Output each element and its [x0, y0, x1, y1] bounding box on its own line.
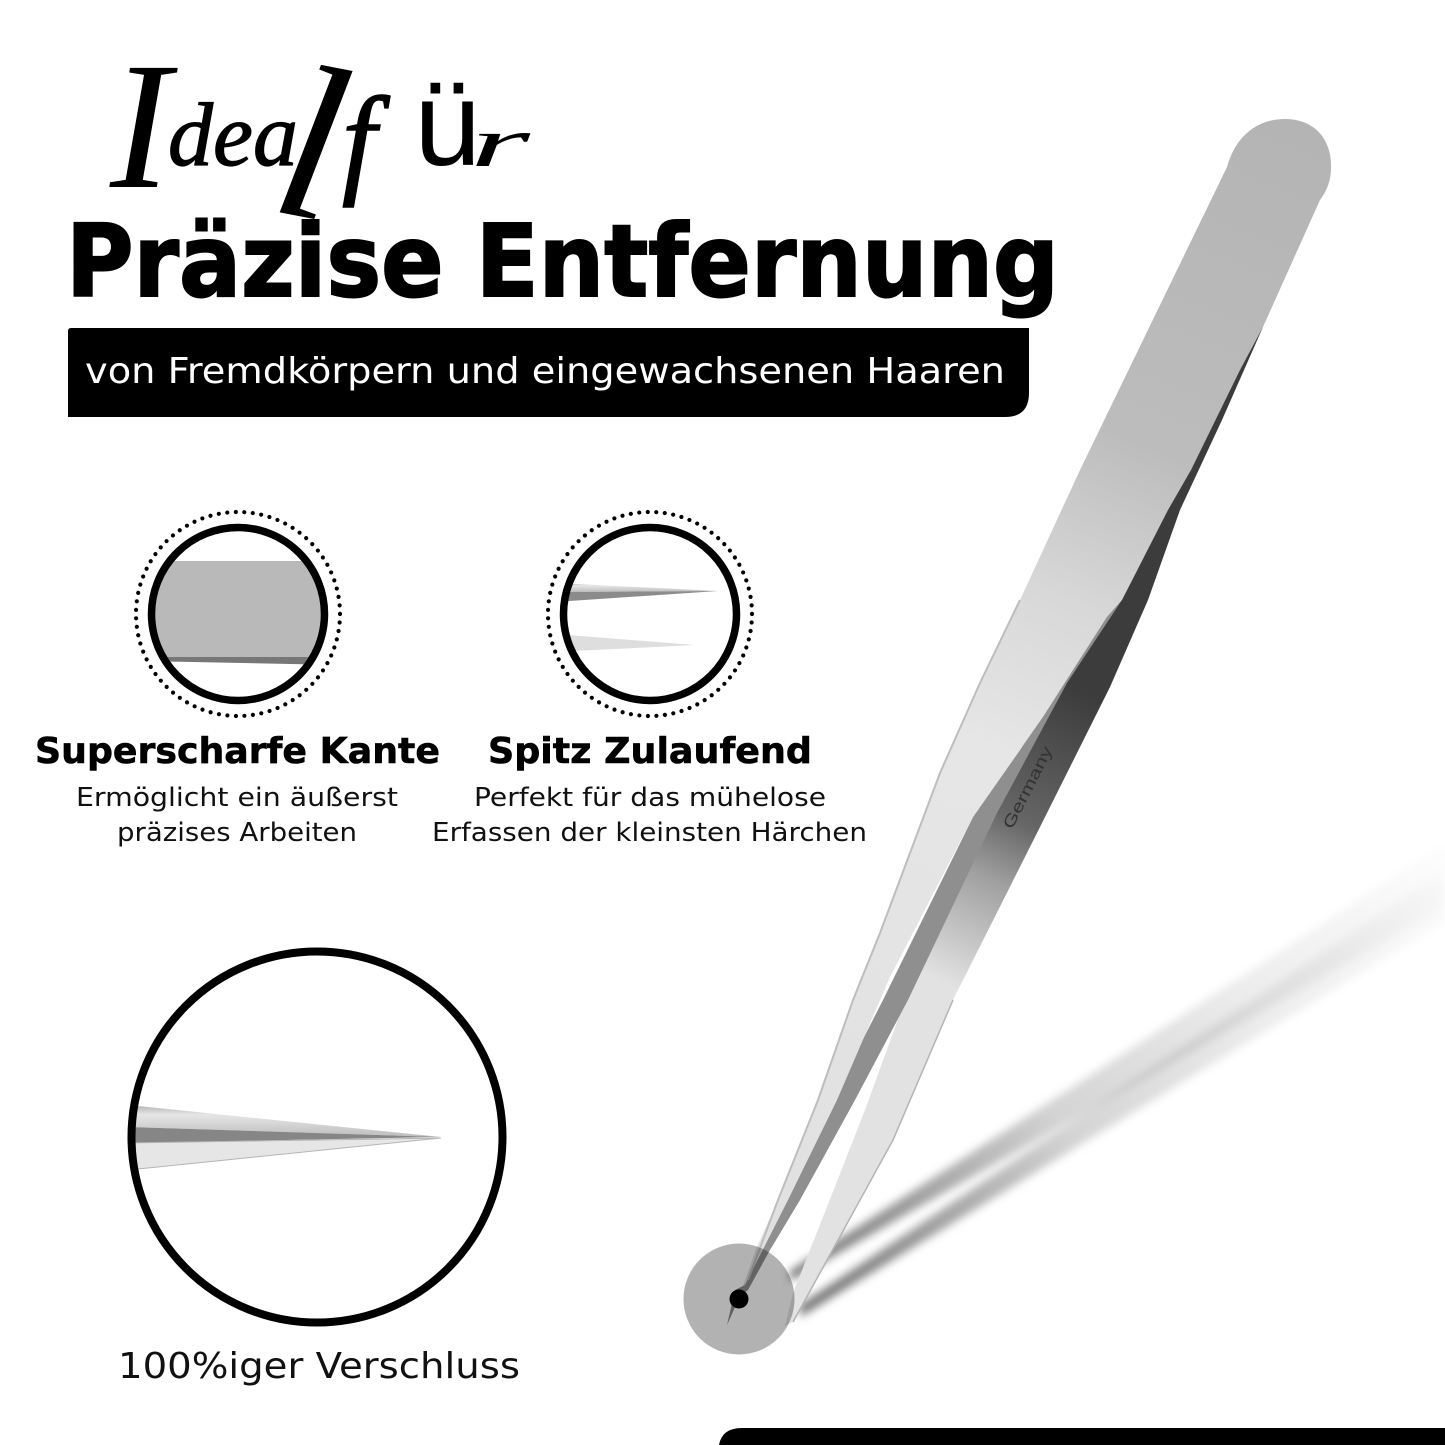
feature text: Spitz Zulaufend	[432, 731, 867, 848]
back leg	[785, 327, 1263, 1326]
shadow of tweezers	[790, 844, 1445, 1317]
subheading banner: von Fremdkörpern und eingewachsenen Haaren	[85, 351, 1005, 392]
tweezers	[727, 119, 1331, 1326]
closure detail circle	[128, 952, 502, 1322]
feature text: Spitz Zulaufend: Erfassen der kleinsten Härchen	[432, 818, 867, 848]
closure caption: 100%iger Verschluss	[118, 1346, 520, 1387]
feature text: Superscharfe Kante: Superscharfe Kante	[35, 731, 440, 772]
script heading: l	[259, 18, 366, 269]
needle tip	[727, 1285, 745, 1325]
tip dot	[730, 1290, 748, 1308]
script heading: r	[470, 105, 532, 182]
script heading: I	[109, 26, 178, 227]
feature icon: sharp edge	[136, 512, 340, 716]
front leg left edge shading	[748, 600, 1020, 1280]
engraving: Germany: Germany	[1000, 744, 1056, 832]
script heading: dea	[168, 86, 298, 185]
feature icon: pointed tips	[548, 512, 752, 716]
script heading	[109, 18, 532, 269]
highlight circle	[684, 1244, 794, 1354]
bottom black bar	[719, 1428, 1445, 1445]
script heading: ü	[414, 57, 481, 191]
feature text: Spitz Zulaufend: Spitz Zulaufend	[488, 731, 812, 772]
script heading: f	[342, 73, 390, 208]
feature text: Superscharfe Kante: präzises Arbeiten	[117, 818, 357, 848]
subheading banner	[68, 328, 1029, 417]
back leg outline	[793, 1000, 953, 1322]
feature text: Superscharfe Kante: Ermöglicht ein äußerst	[76, 783, 398, 813]
front leg	[739, 119, 1331, 1297]
main heading: Präzise Entfernung	[66, 203, 1059, 320]
feature text: Spitz Zulaufend: Perfekt für das mühelose	[474, 783, 826, 813]
feature text: Superscharfe Kante	[35, 731, 440, 848]
inner grey edge	[740, 600, 1122, 1296]
